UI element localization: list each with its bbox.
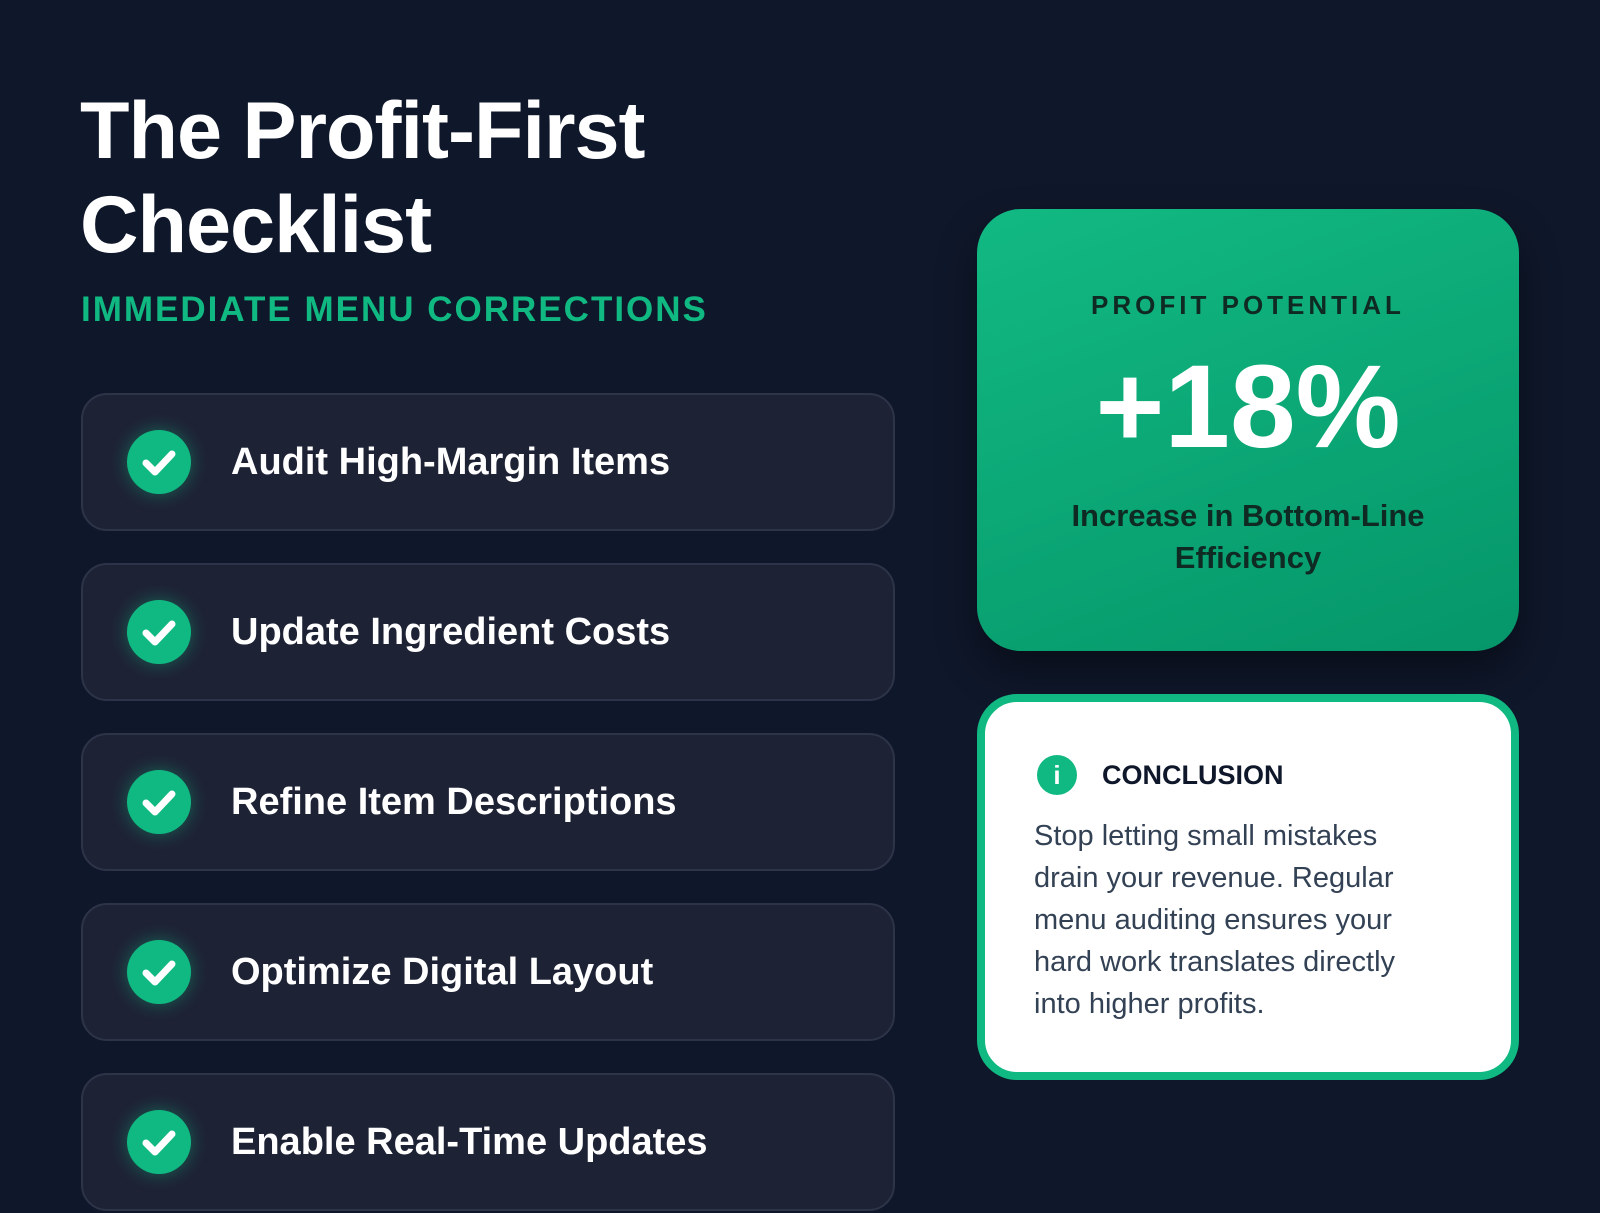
item 5: Enable Real-Time Updates (231, 1121, 708, 1163)
title (80, 86, 644, 270)
item 3: Refine Item Descriptions (231, 781, 677, 823)
panel: conclusion (977, 694, 1519, 1080)
item 4 (81, 903, 895, 1041)
item 3 (81, 733, 895, 871)
item 5 (81, 1073, 895, 1211)
checklist (81, 393, 895, 1211)
panel: profit potential (977, 209, 1519, 651)
text: Stop letting small mistakes drain your revenue. Regular menu auditing ensures your hard work translates directly into higher profits. (1034, 820, 1395, 1020)
subtitle: IMMEDIATE MENU CORRECTIONS (81, 290, 708, 329)
caption (1071, 498, 1425, 575)
big number: +18% (1095, 341, 1401, 473)
item 2 (81, 563, 895, 701)
title: The Profit-First (80, 86, 644, 176)
heading: CONCLUSION (1102, 760, 1284, 790)
item 4: Optimize Digital Layout (231, 951, 653, 993)
icon: info: i (1053, 760, 1061, 790)
title: Checklist (80, 180, 431, 270)
label: PROFIT POTENTIAL (1091, 290, 1405, 320)
caption: Efficiency (1175, 540, 1321, 575)
caption: Increase in Bottom-Line (1071, 498, 1425, 533)
item 1 (81, 393, 895, 531)
icon: info (1037, 755, 1077, 795)
item 1: Audit High-Margin Items (231, 441, 670, 483)
item 2: Update Ingredient Costs (231, 611, 670, 653)
